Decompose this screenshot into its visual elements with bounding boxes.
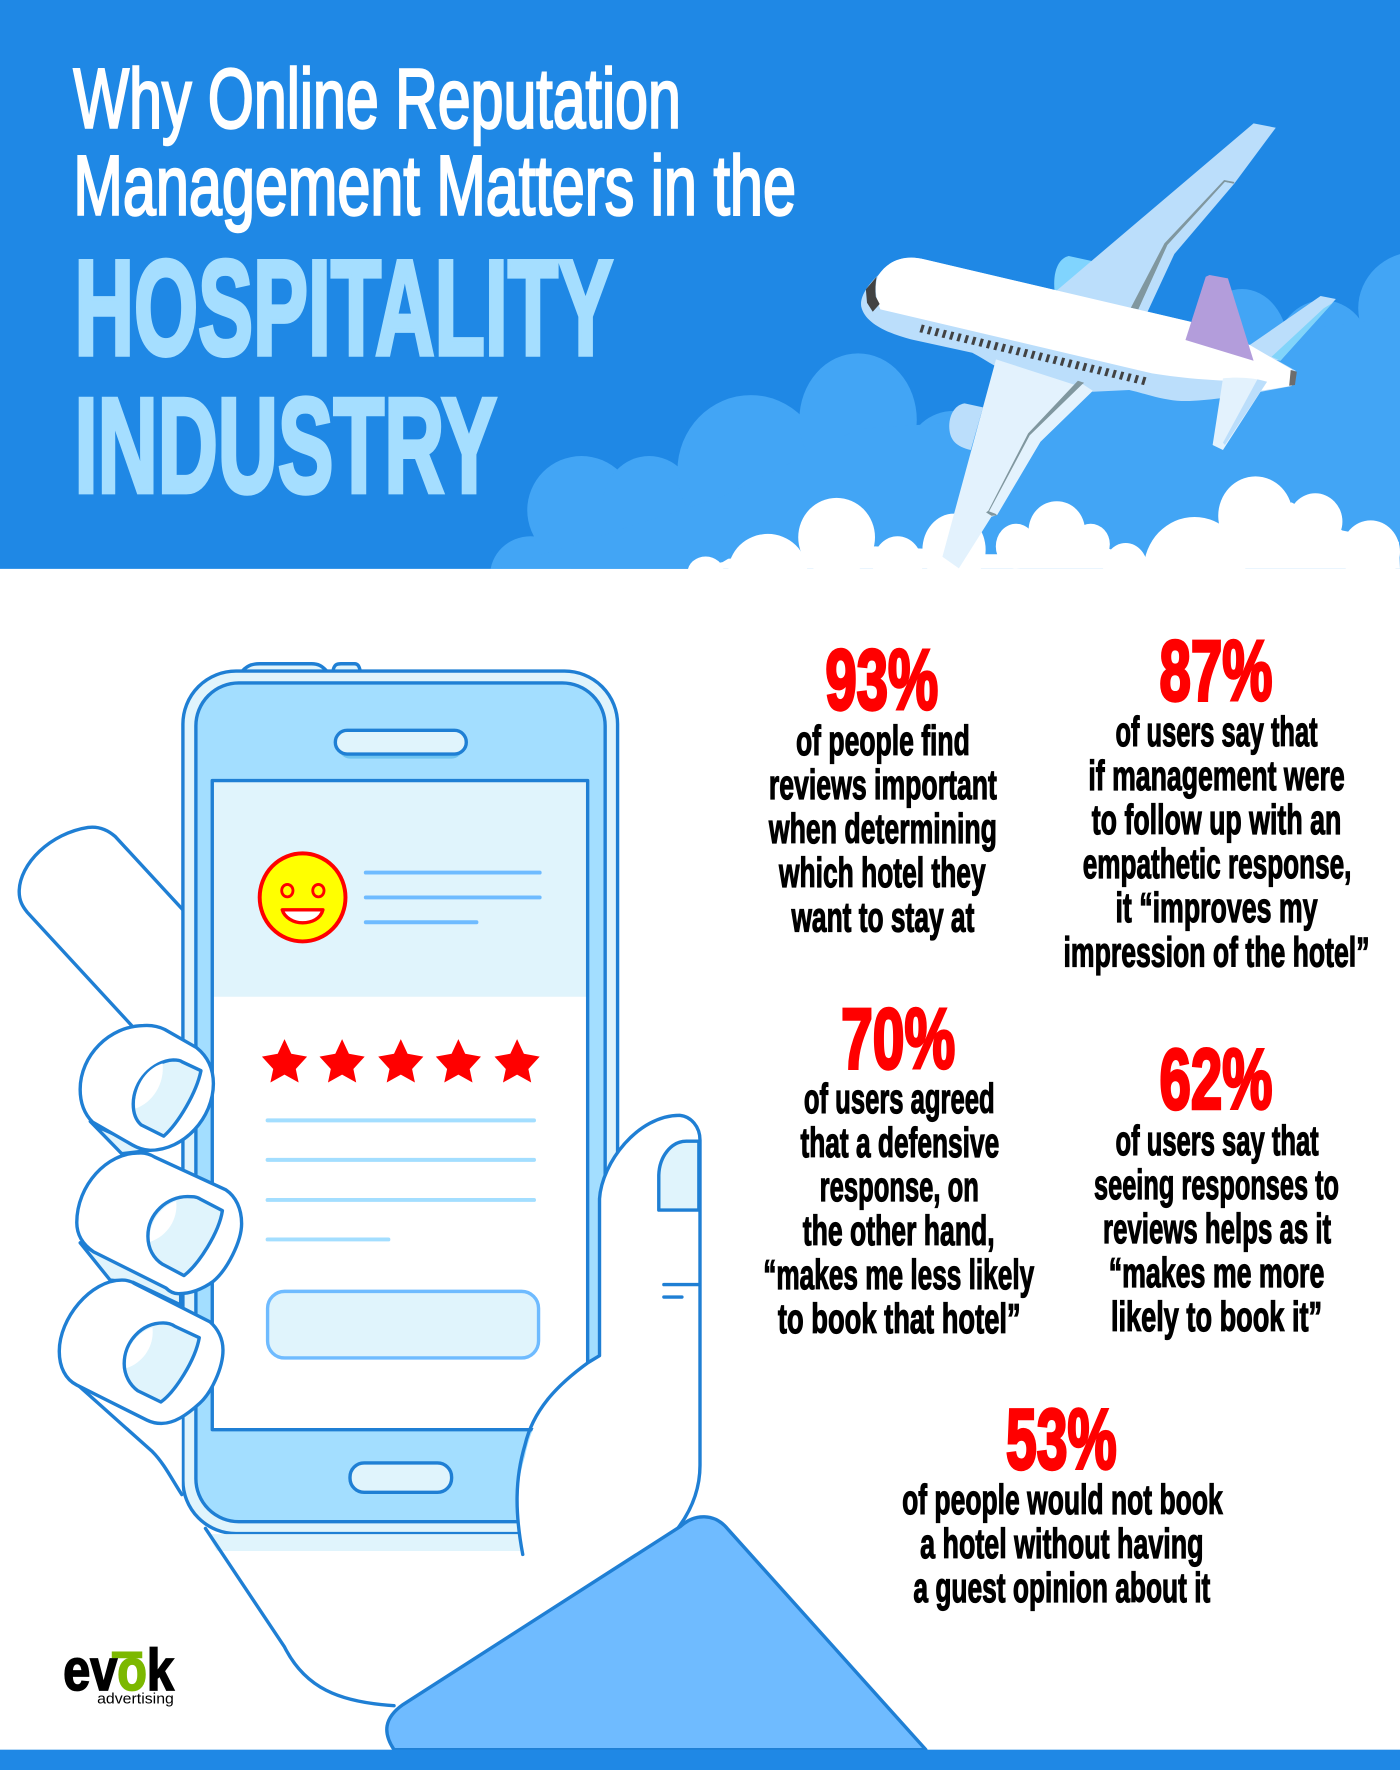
five star rating (262, 1039, 540, 1083)
stat: 70% (763, 991, 1034, 1342)
earpiece (335, 730, 466, 754)
hand edge (78, 1385, 182, 1495)
stat: 62% (1094, 1032, 1339, 1340)
nail 1 (133, 1060, 201, 1136)
far wing (1056, 123, 1276, 312)
nail 2 (148, 1197, 222, 1276)
back finger (19, 827, 183, 1027)
comment text lines (268, 1120, 534, 1239)
icon: smiley face (260, 853, 345, 941)
title line 2: Management Matters in the (73, 137, 796, 232)
call to action button (268, 1291, 539, 1358)
cockpit windshield (866, 277, 880, 312)
percentage: 87% (1160, 623, 1272, 719)
web between fingers one and two (90, 1121, 150, 1154)
near engine (949, 403, 983, 450)
thumb creases (664, 1285, 699, 1297)
near wing flap inner (989, 384, 1093, 514)
front white clouds (688, 476, 1400, 623)
tail fin (1185, 275, 1254, 361)
hand and phone illustration (19, 664, 926, 1750)
title highlight line 1: HOSPITALITY (75, 231, 613, 383)
title line 1: Why Online Reputation (73, 51, 681, 146)
nail 2 highlight (150, 1201, 176, 1242)
description: which hotel they (778, 849, 986, 896)
thumb outline (517, 1115, 700, 1554)
screen border (212, 781, 588, 1430)
description: of people would not book (902, 1476, 1223, 1523)
description (1094, 1117, 1339, 1340)
earpiece shadow (339, 736, 463, 759)
description: reviews important (769, 761, 997, 808)
percentage: 62% (1160, 1032, 1272, 1128)
bottom bar (0, 1750, 1400, 1770)
web between fingers two and three (80, 1243, 181, 1305)
palm outline (205, 1528, 394, 1706)
near stabilizer strip (1223, 379, 1267, 445)
description: “makes me less likely (763, 1251, 1034, 1298)
palm and thumb fill (215, 1115, 700, 1706)
near stabilizer (1213, 378, 1267, 450)
fuselage top (876, 258, 1292, 391)
cabin windows (921, 328, 1149, 382)
description: that a defensive (800, 1119, 999, 1166)
screen (212, 781, 588, 1430)
near wing flap (986, 381, 1084, 516)
phone side buttons (243, 664, 360, 671)
title (73, 51, 796, 521)
logo macron (112, 1651, 142, 1658)
description: of users agreed (804, 1075, 995, 1122)
nail 3 (124, 1323, 199, 1402)
far stabilizer strip (1272, 303, 1333, 361)
thumb nail (659, 1141, 699, 1210)
far wing flap inner (1138, 182, 1234, 312)
home button (350, 1463, 452, 1492)
title highlight line 2: INDUSTRY (75, 369, 497, 521)
description (902, 1476, 1223, 1611)
nail 1 highlight (135, 1063, 163, 1109)
description: a guest opinion about it (913, 1564, 1210, 1611)
description: when determining (768, 805, 997, 852)
percentage: 93% (825, 632, 938, 728)
airplane (861, 123, 1336, 568)
back clouds (490, 252, 1400, 615)
finger 2 (77, 1153, 242, 1294)
percentage: 53% (1006, 1392, 1117, 1488)
description: to book that hotel” (778, 1295, 1021, 1342)
description: a hotel without having (920, 1520, 1204, 1567)
screen review panel (212, 781, 588, 997)
far engine (1054, 256, 1092, 293)
review text lines (366, 873, 540, 922)
phone inner body (196, 683, 605, 1522)
logo wordmark: evok (63, 1638, 174, 1703)
description: want to stay at (791, 893, 974, 940)
finger 1 (80, 1025, 213, 1150)
description: response, on (820, 1163, 979, 1210)
percentage: 70% (841, 991, 955, 1087)
hand edge line (78, 1385, 182, 1495)
logo tagline: advertising (97, 1691, 174, 1707)
far wing flap (1131, 180, 1234, 309)
stat: 93% (768, 632, 997, 940)
stat: 53% (902, 1392, 1223, 1611)
near wing (942, 359, 1093, 568)
fuselage underside (861, 258, 1296, 401)
logo: evok advertising (63, 1638, 174, 1707)
description: of people find (796, 717, 970, 764)
white page background (0, 569, 1400, 1750)
sleeve (387, 1517, 926, 1750)
tail cone (1289, 370, 1297, 386)
nail 3 highlight (126, 1328, 153, 1368)
description (1064, 708, 1370, 975)
finger 3 (59, 1280, 223, 1423)
description (768, 717, 997, 940)
description: the other hand, (803, 1207, 995, 1254)
far stabilizer (1250, 296, 1336, 361)
header background (0, 0, 1400, 569)
phone outer body (183, 671, 618, 1534)
light strip below phone (208, 1534, 522, 1551)
stat: 87% (1064, 623, 1370, 975)
description (763, 1075, 1034, 1342)
